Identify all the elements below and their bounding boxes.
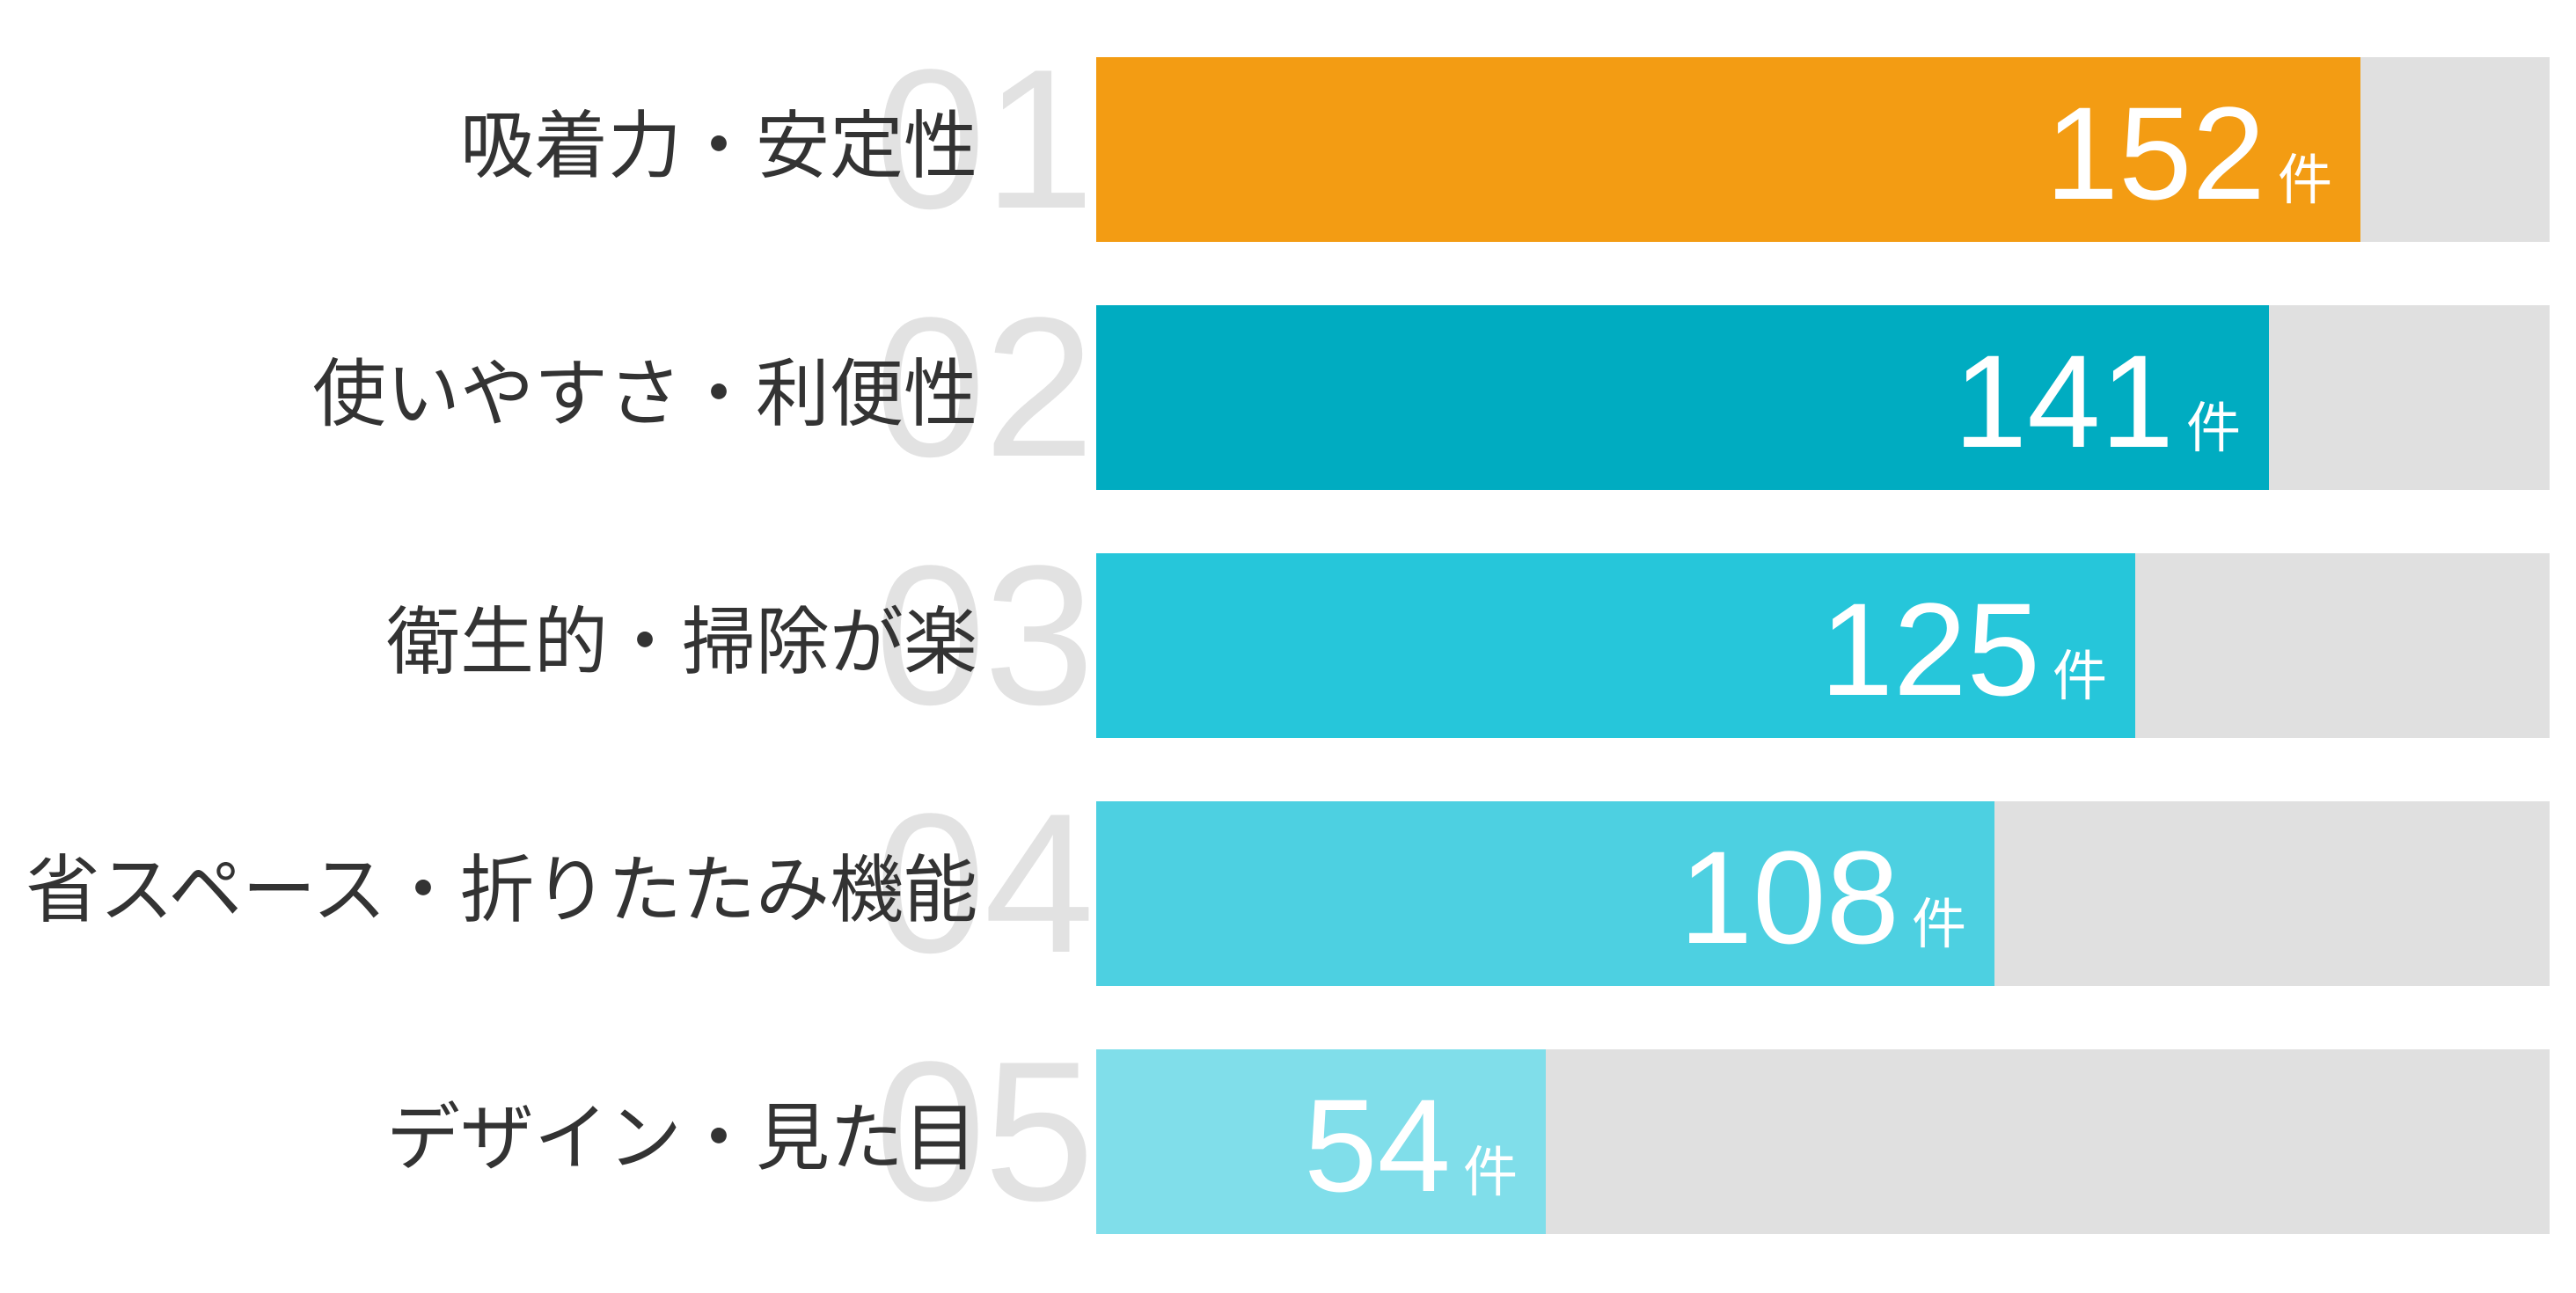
bar track 5	[1096, 1049, 2550, 1234]
bar 4	[1096, 801, 1994, 986]
rank number 02: 02	[875, 275, 1093, 498]
rank number 03: 03	[875, 523, 1093, 746]
bar track 4	[1096, 801, 2550, 986]
bar 3	[1096, 553, 2135, 738]
rank number 01: 01	[875, 27, 1093, 250]
bar 1	[1096, 57, 2360, 242]
bar track 3	[1096, 553, 2550, 738]
rank number 04: 04	[875, 771, 1093, 994]
row 2	[312, 275, 2550, 498]
value 4: 108件	[1680, 823, 1966, 971]
label 4: 省スペース・折りたたみ機能	[26, 849, 977, 931]
bar track 1	[1096, 57, 2550, 242]
bar track 2	[1096, 305, 2550, 490]
label 2: 使いやすさ・利便性	[312, 353, 977, 435]
row 4	[26, 771, 2550, 994]
value 1: 152件	[2045, 79, 2332, 227]
bar 5	[1096, 1049, 1546, 1234]
value 2: 141件	[1954, 327, 2241, 475]
label 5: デザイン・見た目	[386, 1097, 977, 1180]
rank number 05: 05	[875, 1019, 1093, 1242]
value 5: 54件	[1304, 1071, 1518, 1219]
row 5	[386, 1019, 2550, 1242]
value 3: 125件	[1820, 575, 2107, 723]
label 3: 衛生的・掃除が楽	[386, 601, 977, 683]
row 1	[460, 27, 2550, 250]
row 3	[386, 523, 2550, 746]
label 1: 吸着力・安定性	[460, 105, 977, 187]
bar 2	[1096, 305, 2269, 490]
